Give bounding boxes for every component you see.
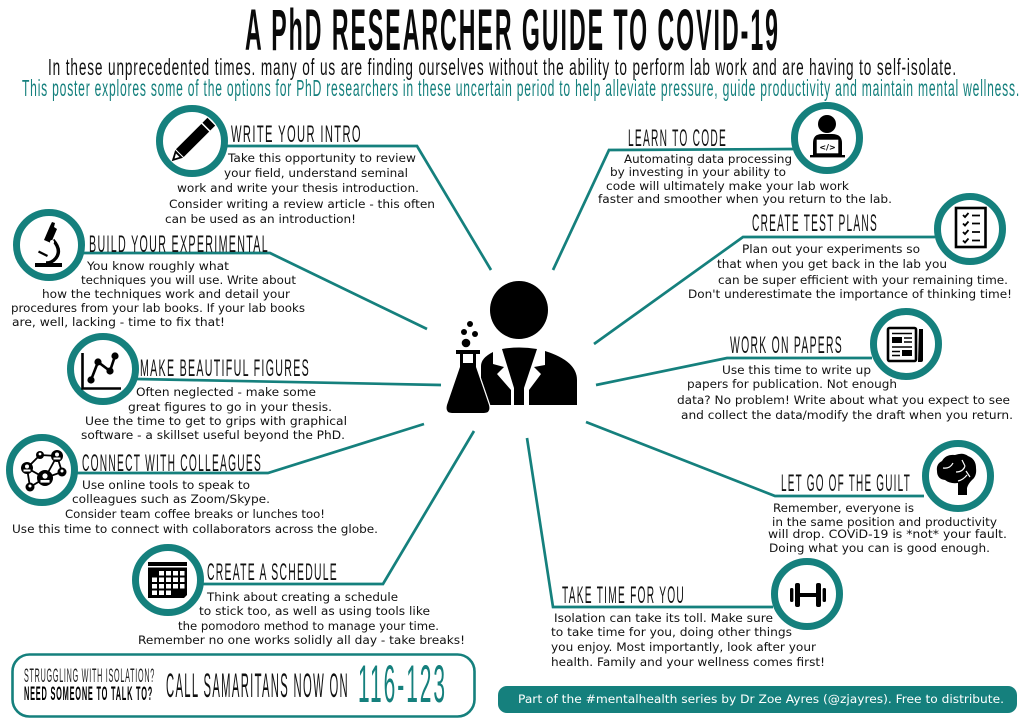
text: make beautiful figures: software - a skillset useful beyond the PhD.: [81, 428, 345, 442]
text: build your experimental: techniques you will use. Write about: [81, 273, 297, 287]
text: learn to code: by investing in your ability to: [610, 165, 786, 179]
text: write your intro: your field, understand seminal: [224, 166, 408, 180]
text: work on papers: data? No problem! Write about what you expect to see: [677, 393, 1010, 407]
text: connect with colleagues: Use this time to connect with collaborators across the globe.: [12, 522, 378, 536]
icon: brain: [926, 444, 990, 508]
icon: pencil: [160, 108, 224, 174]
text: create a schedule: Think about creating a schedule: [206, 590, 398, 604]
text: take time for you: you enjoy. Most importantly, look after your: [551, 640, 816, 654]
panel: learn to code: [553, 106, 892, 270]
central icon: researcher with flask: [447, 281, 577, 413]
text: build your experimental: how the techniques work and detail your: [42, 287, 290, 301]
panel: create test plans: [594, 196, 1012, 344]
text: learn to code: faster and smoother when you return to the lab.: [598, 192, 892, 206]
text: make beautiful figures: Often neglected - make some: [136, 385, 316, 399]
text: let go of the guilt: in the same position and productivity: [772, 515, 997, 529]
text: write your intro: work and write your thesis introduction.: [177, 181, 419, 195]
text: make beautiful figures: Uee the time to get to grips with graphical: [85, 414, 347, 428]
text: create a schedule: Remember no one works solidly all day - take breaks!: [138, 633, 465, 647]
icon: line chart: [70, 336, 136, 402]
text: build your experimental: procedures from your lab books. If your lab books: [11, 301, 305, 315]
text: work on papers: and collect the data/modify the draft when you return.: [681, 408, 1013, 422]
footer credit banner: [498, 686, 1017, 713]
text: learn to code: code will ultimately make your lab work: [606, 179, 849, 193]
text: connect with colleagues: Consider team coffee breaks or lunches too!: [65, 507, 325, 521]
text: create a schedule: the pomodoro method to manage your time.: [178, 619, 439, 633]
text: write your intro: Consider writing a review article - this often: [169, 197, 435, 211]
text: create test plans: Don't underestimate the importance of thinking time!: [688, 287, 1012, 301]
connector: learn to code: [553, 149, 793, 270]
text: connect with colleagues: [12, 478, 378, 536]
text: let go of the guilt: will drop. COViD-19 is *not* your fault.: [768, 527, 1007, 541]
connector: take time for you: [527, 438, 773, 607]
icon: coder at laptop: [794, 106, 860, 170]
panel: create a schedule: CREATE A SCHEDULE: [207, 559, 338, 586]
text: work on papers: Use this time to write up: [722, 363, 871, 377]
text: write your intro: Take this opportunity to review: [227, 151, 416, 165]
icon: dumbbell: [774, 562, 840, 626]
panel: write your intro: WRITE YOUR INTRO: [231, 121, 362, 148]
footer credit banner: Part of the #mentalhealth series by Dr Zoe Ayres (@zjayres). Free to distribute.: [518, 692, 1004, 706]
connector: create a schedule: [201, 431, 474, 584]
connector: make beautiful figures: [137, 379, 441, 385]
icon: checklist: [938, 196, 1002, 262]
panel: make beautiful figures: [70, 336, 441, 442]
connector: build your experimental: [83, 253, 427, 329]
icon: network: [10, 438, 74, 502]
text: write your intro: [165, 151, 435, 226]
text: work on papers: papers for publication. Not enough: [687, 377, 897, 391]
connector: work on papers: [596, 358, 872, 385]
callout: samaritans helpline: CALL SAMARITANS NOW ON: [166, 667, 349, 705]
icon: coder at laptop: </>: [819, 143, 836, 152]
panel: make beautiful figures: MAKE BEAUTIFUL FIGURES: [140, 355, 310, 382]
panel: connect with colleagues: CONNECT WITH COLLEAGUES: [82, 450, 262, 477]
text: take time for you: Isolation can take its toll. Make sure: [554, 611, 773, 625]
connector: connect with colleagues: [76, 424, 424, 473]
text: create test plans: Plan out your experiments so: [742, 242, 920, 256]
panel: work on papers: [596, 312, 1013, 422]
text: learn to code: [598, 152, 892, 206]
text: create test plans: [688, 242, 1012, 301]
text: create test plans: can be super efficient with your remaining time.: [718, 273, 1008, 287]
connector: write your intro: [226, 146, 491, 270]
text: take time for you: [551, 611, 825, 669]
text: build your experimental: are, well, lacking - time to fix that!: [12, 315, 225, 329]
connector: let go of the guilt: [586, 422, 924, 496]
icon: newspaper: [874, 312, 938, 376]
text: let go of the guilt: Doing what you can is good enough.: [769, 541, 990, 555]
text: learn to code: Automating data processing: [624, 152, 792, 166]
text: take time for you: to take time for you, doing other things: [551, 625, 792, 639]
text: build your experimental: You know roughly what: [86, 259, 230, 273]
text: write your intro: can be used as an introduction!: [165, 212, 356, 226]
panel: connect with colleagues: [10, 424, 424, 536]
text: let go of the guilt: Remember, everyone is: [773, 501, 914, 515]
text: let go of the guilt: [768, 501, 1007, 555]
callout: samaritans helpline: 116-123: [358, 655, 447, 714]
text: create test plans: that when you get back in the lab you: [717, 257, 947, 271]
text: connect with colleagues: colleagues such as Zoom/Skype.: [72, 492, 270, 506]
text: make beautiful figures: [81, 385, 347, 442]
icon: microscope: [16, 212, 82, 278]
panel: create a schedule: [136, 431, 474, 647]
panel: let go of the guilt: [586, 422, 1007, 555]
text: build your experimental: [11, 259, 305, 329]
text: create a schedule: to stick too, as well as using tools like: [199, 604, 430, 618]
panel: take time for you: [527, 438, 840, 669]
panel: take time for you: TAKE TIME FOR YOU: [562, 582, 685, 609]
text: work on papers: [677, 363, 1013, 422]
text: connect with colleagues: Use online tools to speak to: [82, 478, 250, 492]
callout: samaritans helpline: NEED SOMEONE TO TALK TO?: [24, 684, 153, 705]
text: take time for you: health. Family and your wellness comes first!: [551, 655, 825, 669]
text: create a schedule: [138, 590, 465, 647]
icon: calendar: [136, 548, 200, 612]
panel: work on papers: WORK ON PAPERS: [730, 332, 843, 359]
callout: samaritans helpline: STRUGGLING WITH ISOLATION?: [24, 666, 155, 687]
text: make beautiful figures: great figures to go in your thesis.: [128, 400, 332, 414]
panel: write your intro: [160, 108, 491, 270]
panel: learn to code: LEARN TO CODE: [628, 125, 727, 152]
panel: build your experimental: BUILD YOUR EXPERIMENTAL: [89, 231, 269, 258]
callout: samaritans helpline: [12, 654, 474, 716]
connector: create test plans: [594, 237, 935, 344]
panel: build your experimental: [11, 212, 427, 329]
